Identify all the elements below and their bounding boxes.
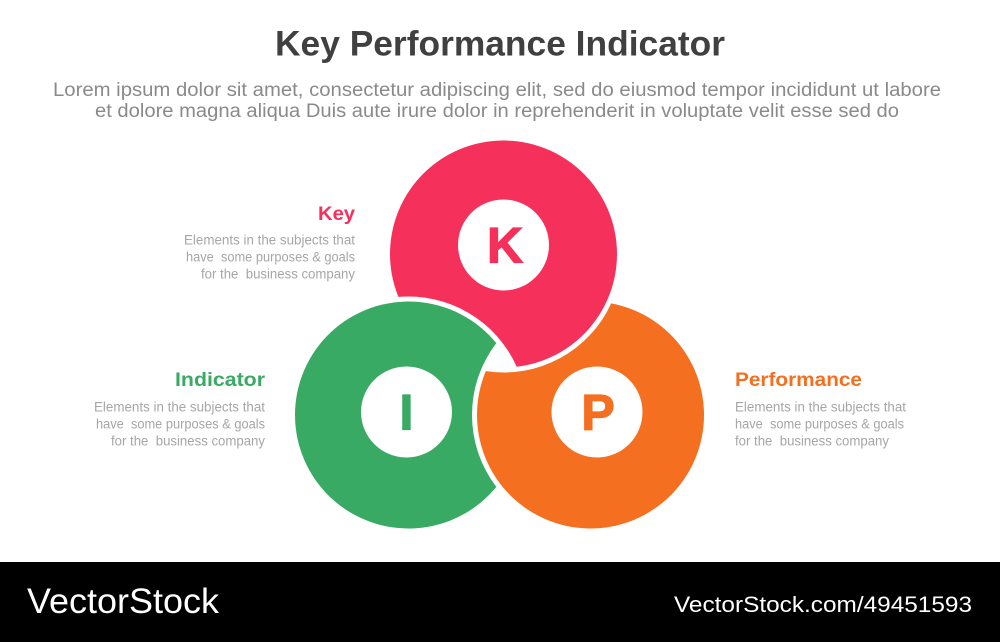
text block: Performance: Performance	[735, 370, 862, 391]
title: Key Performance Indicator	[275, 24, 725, 64]
text block: Indicator: Elements in the subjects that	[94, 400, 265, 414]
segment: K red circle	[390, 141, 617, 367]
segment: P orange circle: P	[581, 384, 615, 440]
text block: Indicator: Indicator	[175, 370, 266, 391]
text block: Key: Key	[318, 204, 355, 225]
text block: Performance	[735, 370, 906, 448]
footer bar	[0, 562, 1000, 642]
text block: Key: Elements in the subjects that	[184, 232, 355, 248]
text block: Indicator: have some purposes & goals	[96, 416, 265, 432]
text block: Performance: have some purposes & goals	[735, 416, 904, 432]
text block: Performance: for the business company	[735, 434, 889, 448]
segment: I green circle	[295, 301, 496, 528]
footer logo: VectorStock	[27, 582, 220, 621]
text block: Performance: Elements in the subjects that	[735, 400, 906, 414]
subtitle text block: et dolore magna aliqua Duis aute irure dolor in reprehenderit in voluptate velit esse sed do	[95, 101, 899, 122]
segment: P orange circle	[477, 303, 704, 529]
text block: Indicator	[94, 370, 266, 448]
subtitle text block	[53, 80, 941, 122]
text block: Indicator: for the business company	[111, 434, 265, 448]
subtitle text block: Lorem ipsum dolor sit amet, consectetur adipiscing elit, sed do eiusmod tempor incididunt ut labore	[53, 80, 941, 101]
venn diagram	[295, 141, 704, 529]
footer url: VectorStock.com/49451593	[674, 592, 972, 617]
text block: Key: have some purposes & goals	[186, 250, 355, 264]
segment: K red circle: K	[487, 218, 523, 274]
text block: Key: for the business company	[201, 266, 355, 282]
segment: I green circle: I	[400, 384, 413, 440]
text block: Key	[184, 204, 355, 282]
